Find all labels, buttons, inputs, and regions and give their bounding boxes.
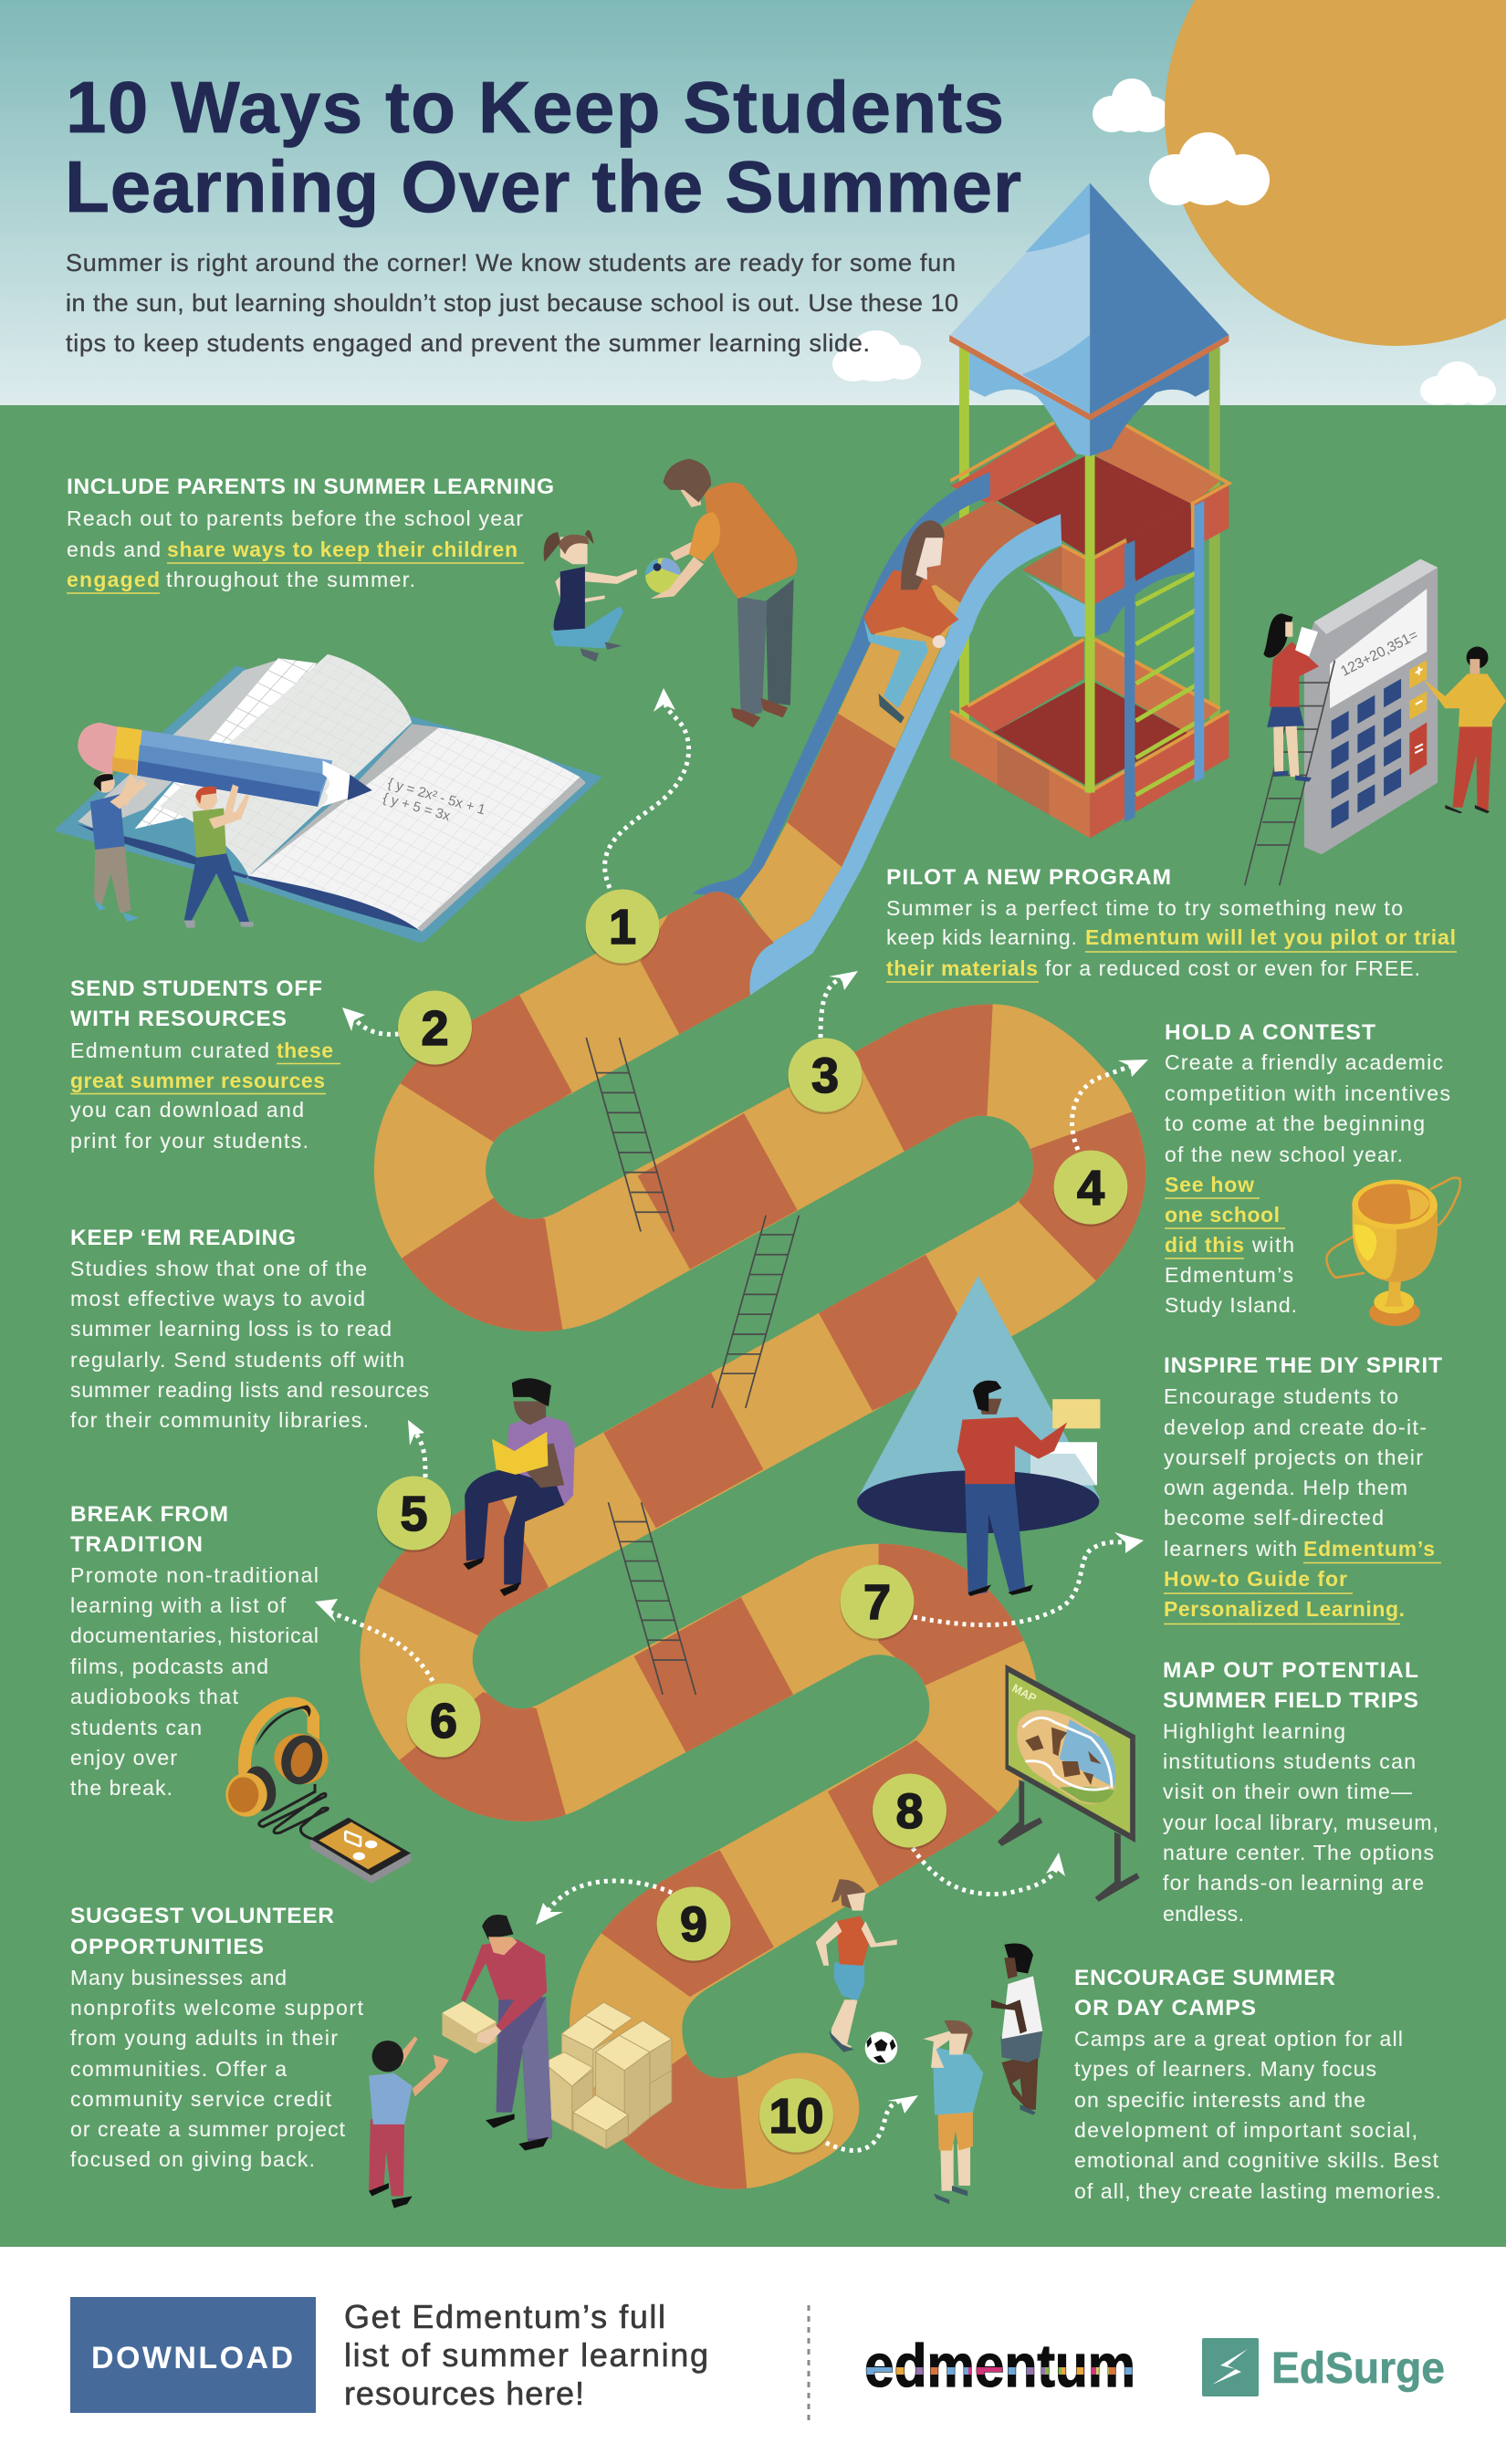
arrow 10 [826,2095,918,2150]
tip: hold a contest: one school [1165,1203,1280,1227]
tip: pilot a new program: PILOT A NEW PROGRAM [886,865,1171,890]
tip: break from tradition: learning with a list of [70,1593,287,1617]
arrow 3 [821,971,858,1038]
edsurge logo: EdSurge [1271,2344,1445,2393]
woman on slide [863,520,958,724]
tip: encourage summer camps: on specific interests and the [1074,2088,1365,2112]
figures and boxes [369,1879,1042,2208]
footer call to action: Get Edmentum’s full [344,2298,665,2335]
tip: inspire the diy spirit [1164,1353,1442,1624]
arrow 5 [408,1420,425,1477]
tip: break from tradition: students can [70,1716,202,1739]
DIY man [957,1381,1067,1596]
tip: keep em reading: most effective ways to avoid [70,1287,365,1310]
tip: encourage summer camps: ENCOURAGE SUMMER [1074,1966,1335,1990]
tip: hold a contest: competition with incentives [1165,1081,1450,1105]
tip: send students off: WITH RESOURCES [70,1007,287,1031]
tip: map out field trips: your local library, museum, [1163,1811,1438,1834]
badge 8 [873,1774,947,1850]
tip: suggest volunteer opportunities: focused on giving back. [70,2147,315,2171]
tip: suggest volunteer opportunities [70,1904,364,2171]
badge 2: 2 [421,1001,449,1056]
tip: keep em reading: KEEP ‘EM READING [70,1226,296,1250]
intro text [66,249,958,357]
arrow 8 [913,1848,1065,1895]
download button [70,2297,316,2413]
slide light rail [746,514,1062,996]
arrow 9 [536,1881,672,1925]
tip: inspire the diy spirit: yourself projects on their [1164,1446,1423,1469]
tip: hold a contest: HOLD A CONTEST [1165,1020,1375,1045]
badge 10: 10 [769,2089,823,2144]
badge 4: 4 [1077,1161,1104,1216]
badge 5: 5 [400,1487,428,1541]
tip: send students off: you can download and [70,1098,304,1122]
badge 7: 7 [863,1575,891,1630]
open book [56,654,602,943]
tip: inspire the diy spirit: become self-directed [1164,1506,1384,1530]
tip: send students off: print for your students. [70,1129,309,1153]
tip: pilot a new program: Summer is a perfect time to try something new to [886,896,1403,920]
intro text: in the sun, but learning shouldn’t stop just because school is out. Use these 10 [66,289,958,317]
DIY cone [857,1276,1100,1533]
tip: hold a contest: did this [1165,1233,1244,1257]
tip: hold a contest: See how [1165,1173,1254,1196]
tip: send students off: Edmentum curated [70,1039,269,1062]
sky background [0,0,1506,406]
tip: hold a contest: Create a friendly academic [1165,1050,1443,1074]
arrow 7 [914,1532,1144,1625]
child volunteer [369,2036,449,2208]
tip: map out field trips: Highlight learning [1163,1719,1345,1743]
intro text: tips to keep students engaged and prevent the summer learning slide. [66,329,870,357]
title: Learning Over the Summer [65,146,1021,227]
badge 4 [1053,1150,1128,1227]
map board: MAP [1009,1682,1039,1705]
tip: inspire the diy spirit: own agenda. Help them [1164,1476,1407,1499]
badge 5 [376,1477,451,1552]
calculator [1304,559,1438,854]
tip: inspire the diy spirit: Personalized Learning. [1164,1597,1405,1621]
tip: encourage summer camps: development of important social, [1074,2118,1417,2142]
tip: hold a contest: with [1251,1233,1294,1257]
man with ball [645,459,797,727]
cloud: beside intro [832,330,921,381]
tip: map out field trips: MAP OUT POTENTIAL [1163,1658,1418,1683]
man at calculator [1423,647,1506,813]
tip: inspire the diy spirit: learners with [1164,1537,1297,1561]
tip: encourage summer camps: OR DAY CAMPS [1074,1996,1256,2020]
badge 3 [788,1039,863,1114]
boxes stack [543,2002,672,2149]
cloud: right horizon [1420,361,1496,405]
student with glasses [90,773,147,922]
tip: suggest volunteer opportunities: SUGGEST VOLUNTEER [70,1904,334,1928]
tip: encourage summer camps: emotional and cognitive skills. Best [1074,2148,1439,2172]
dotted arrows [315,688,1148,2150]
tip: map out field trips: institutions students can [1163,1749,1416,1773]
tip: keep em reading: regularly. Send students off with [70,1348,404,1372]
tip: suggest volunteer opportunities: OPPORTUNITIES [70,1935,264,1959]
trophy [1326,1178,1460,1326]
tip: encourage summer camps: of all, they create lasting memories. [1074,2179,1441,2203]
student reading [463,1378,575,1596]
tip: map out field trips: nature center. The options [1163,1841,1434,1864]
road base [360,892,1145,2189]
tip: hold a contest: of the new school year. [1165,1143,1403,1166]
badge 1: 1 [609,900,636,955]
tip: pilot a new program [886,865,1457,982]
tip: map out field trips: for hands-on learning are [1163,1871,1424,1895]
tip: break from tradition: Promote non-traditional [70,1563,319,1587]
badge 8: 8 [895,1784,924,1839]
map board [998,1665,1139,1902]
tower rear posts [959,348,1220,724]
slide chute [739,501,1040,943]
edmentum logo [865,2342,1133,2387]
tip: hold a contest: to come at the beginning [1165,1112,1425,1135]
tip: include parents: engaged [67,568,160,591]
footer call to action [344,2298,708,2412]
tower upper deck [950,423,1229,638]
dashed divider [807,2305,811,2420]
tip: break from tradition: audiobooks that [70,1685,239,1708]
badge 6 [406,1683,481,1759]
footer call to action: resources here! [344,2375,584,2412]
badge 6: 6 [430,1694,457,1749]
badge 7 [840,1564,915,1641]
girl [544,530,637,662]
tip: break from tradition: BREAK FROM [70,1502,228,1527]
sun [1165,0,1506,346]
tip: encourage summer camps: Camps are a great option for all [1074,2027,1403,2051]
tip: pilot a new program: for a reduced cost or even for FREE. [1045,956,1420,980]
tip: keep em reading: for their community libraries. [70,1408,369,1432]
tower ladder [1124,501,1204,822]
badge 3: 3 [811,1049,839,1103]
tip: suggest volunteer opportunities: communities. Offer a [70,2057,287,2081]
badge 9 [656,1887,731,1963]
slide and tower [693,183,1506,996]
tip: break from tradition: the break. [70,1776,173,1800]
boy looking [923,2020,983,2204]
numbered badges [376,889,1128,2155]
calculator: 123+20,351= [1338,627,1421,680]
ladder 1 [586,1038,674,1232]
tower roof [949,183,1229,456]
lower illustrations [369,1665,1139,2208]
tip: keep em reading: summer reading lists and resources [70,1378,429,1402]
arrow 6 [315,1599,433,1681]
tip: map out field trips [1163,1658,1438,1926]
arrow 2 [342,1008,399,1034]
tower lower box [950,639,1229,838]
tip: include parents: ends and [67,538,161,561]
tip: map out field trips: visit on their own time— [1163,1780,1412,1803]
woman with clipboard [1263,613,1319,782]
tip: map out field trips: SUMMER FIELD TRIPS [1163,1688,1418,1713]
tip: break from tradition: TRADITION [70,1532,203,1557]
arrow 4 [1072,1060,1148,1150]
cloud: over sun [1149,132,1270,205]
ladder 3 [608,1502,695,1695]
badge 9: 9 [680,1897,707,1952]
grass background [0,405,1506,2247]
tip: inspire the diy spirit: Edmentum’s [1303,1537,1435,1561]
tip: break from tradition: films, podcasts and [70,1655,268,1678]
cloud: behind sun [1093,78,1170,132]
intro text: Summer is right around the corner! We know students are ready for some fun [66,249,956,277]
footer background [0,2247,1506,2464]
boy with dark hair [991,1944,1042,2115]
tip: inspire the diy spirit: develop and create do-it- [1164,1415,1427,1439]
title [65,67,1021,227]
tip: inspire the diy spirit: How-to Guide for [1164,1567,1347,1591]
tip: hold a contest: Study Island. [1165,1293,1297,1317]
road terracotta squares [378,882,1185,2198]
arrow 1 [605,688,689,888]
tip: encourage summer camps [1074,1966,1441,2203]
open book: { y + 5 = 3x [382,790,453,824]
calculator ladder [1245,661,1334,885]
tip: inspire the diy spirit: INSPIRE THE DIY SPIRIT [1164,1353,1442,1378]
tip: keep em reading: Studies show that one of the [70,1257,367,1280]
tip: suggest volunteer opportunities: Many businesses and [70,1966,287,1989]
tip: include parents: INCLUDE PARENTS IN SUMMER LEARNING [67,475,554,499]
download button: DOWNLOAD [91,2341,293,2375]
tip: pilot a new program: keep kids learning. [886,925,1077,949]
tip: suggest volunteer opportunities: community service credit [70,2087,332,2111]
tip: pilot a new program: their materials [886,956,1038,980]
badge 2 [398,991,473,1067]
tip: inspire the diy spirit: Encourage students to [1164,1384,1398,1408]
tip: include parents: share ways to keep their children [167,538,518,561]
tip: pilot a new program: Edmentum will let you pilot or trial [1085,925,1456,949]
soccer ball [865,2031,897,2064]
headphones and phone [225,1697,411,1884]
edmentum logo: edmentum [864,2332,1135,2399]
tip: send students off: SEND STUDENTS OFF [70,976,322,1001]
tip: break from tradition: enjoy over [70,1746,177,1770]
tip: keep em reading [70,1226,429,1432]
open book: { y = 2x² - 5x + 1 [386,776,487,818]
title: 10 Ways to Keep Students [66,67,1004,148]
pencil [78,723,372,808]
tip: break from tradition: documentaries, historical [70,1624,319,1647]
soccer girl [816,1879,897,2052]
student in green [184,784,254,928]
tip: encourage summer camps: types of learners. Many focus [1074,2057,1376,2081]
tip: suggest volunteer opportunities: from young adults in their [70,2026,338,2050]
slide dark rail [693,472,990,898]
tower centre post [1085,421,1095,792]
tip: suggest volunteer opportunities: nonprofits welcome support [70,1996,364,2020]
tip: send students off: great summer resources [70,1069,325,1092]
edsurge logo [1202,2338,1445,2396]
badge 1 [585,889,660,966]
badge 10 [759,2079,834,2155]
tip: send students off: these [277,1039,333,1062]
tip: include parents: Reach out to parents before the school year [67,506,523,530]
road [360,882,1185,2198]
ladder 2 [712,1216,799,1408]
tip: break from tradition [70,1502,319,1800]
tip: hold a contest [1165,1020,1450,1317]
man carrying box [442,1915,552,2151]
tip: include parents [67,475,554,593]
footer call to action: list of summer learning [344,2336,708,2374]
tip: keep em reading: summer learning loss is to read [70,1317,392,1341]
tip: map out field trips: endless. [1163,1902,1244,1926]
parents illustration and book group [56,459,797,943]
tip: send students off [70,976,340,1153]
tip: hold a contest: Edmentum’s [1165,1263,1293,1287]
tip: suggest volunteer opportunities: or create a summer project [70,2117,346,2141]
tip: include parents: throughout the summer. [166,568,415,591]
